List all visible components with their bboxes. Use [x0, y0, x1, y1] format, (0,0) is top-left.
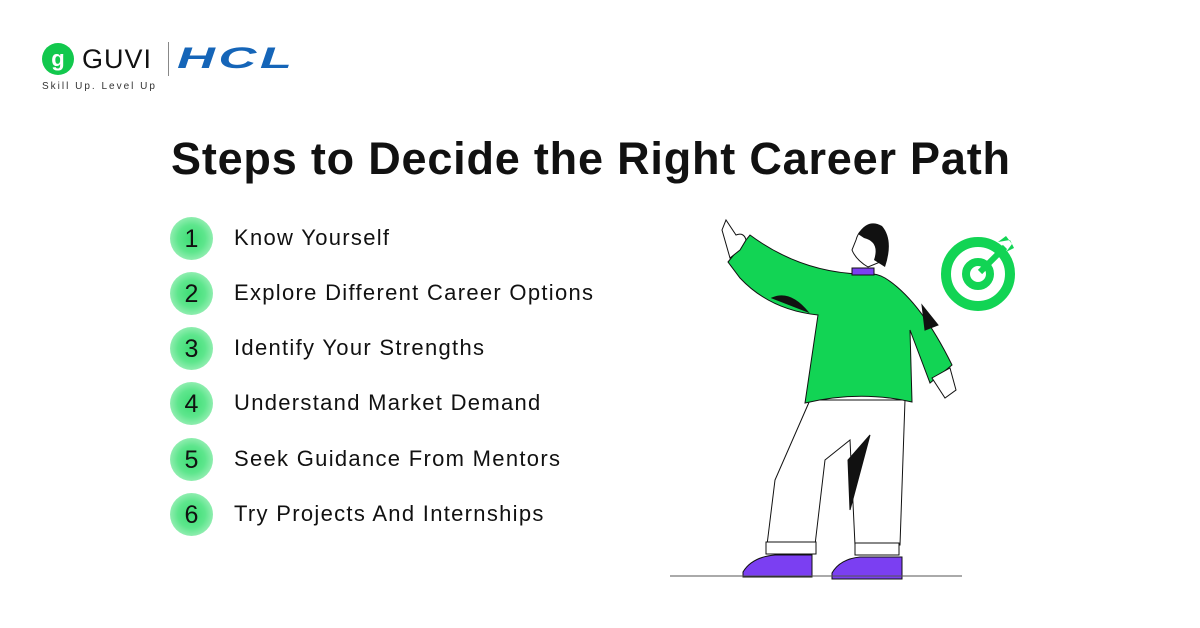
icon: guvi circle: g: [51, 46, 65, 71]
tagline: Skill Up. Level Up: [42, 81, 157, 92]
step 2: 2: [185, 280, 198, 308]
step 4: [170, 382, 542, 425]
person: [722, 220, 956, 579]
ground line: [670, 575, 962, 577]
legs: [767, 400, 905, 545]
step 5: Seek Guidance From Mentors: [234, 446, 561, 471]
step 1: [170, 217, 390, 260]
step 3: Identify Your Strengths: [234, 335, 485, 360]
steps list: [170, 217, 594, 536]
guvi wordmark: GUVI: [82, 44, 152, 74]
step 6: [170, 493, 545, 536]
title: Steps to Decide the Right Career Path: [171, 133, 1011, 184]
head: [852, 228, 886, 267]
step 1: Know Yourself: [234, 225, 390, 250]
step 2: Explore Different Career Options: [234, 280, 594, 305]
step 6: 6: [185, 501, 198, 529]
shoes: [743, 555, 812, 577]
icon: target: [946, 236, 1014, 306]
hcl wordmark: HCL: [177, 42, 295, 75]
step 2: [170, 272, 594, 315]
icon: guvi circle: [42, 43, 74, 75]
step 4: 4: [185, 390, 198, 418]
logo: [42, 42, 295, 92]
torso and arm: [728, 235, 952, 403]
step 5: 5: [185, 446, 198, 474]
collar: [852, 268, 874, 275]
step 6: Try Projects And Internships: [234, 501, 545, 526]
step 1: 1: [185, 225, 198, 253]
cuffs: [766, 542, 816, 554]
illustration: person pointing at target: [670, 219, 1015, 580]
step 3: [170, 327, 485, 370]
step 4: Understand Market Demand: [234, 390, 542, 415]
step 5: [170, 438, 561, 481]
step 3: 3: [185, 335, 198, 363]
hands: [722, 220, 746, 258]
